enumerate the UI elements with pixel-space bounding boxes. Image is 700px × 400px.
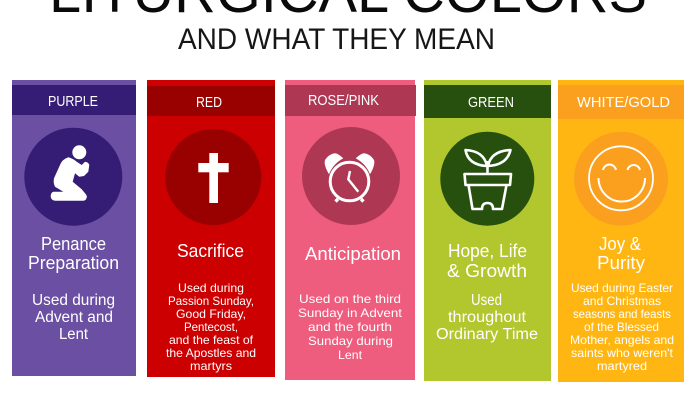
gold usage: and Christmas xyxy=(583,294,661,308)
green meaning xyxy=(447,241,527,281)
green usage: Ordinary Time xyxy=(436,326,538,343)
panel: red xyxy=(147,80,275,377)
icon: potted plant xyxy=(440,132,534,226)
red usage: Pentecost, xyxy=(184,320,238,334)
gold usage: martyred xyxy=(597,359,647,373)
green header: GREEN xyxy=(468,94,514,111)
pink meaning: Anticipation xyxy=(305,244,401,264)
pink usage: Used on the third xyxy=(299,292,401,306)
pink header: ROSE/PINK xyxy=(308,92,379,109)
panel: rose/pink xyxy=(285,80,416,380)
red usage: the Apostles and xyxy=(166,346,256,360)
gold meaning: Joy & xyxy=(599,234,641,254)
gold usage xyxy=(570,281,674,373)
gold header xyxy=(558,85,684,119)
purple meaning: Penance xyxy=(41,234,106,254)
gold usage: saints who weren't xyxy=(571,346,674,360)
red header xyxy=(147,86,275,116)
purple meaning xyxy=(28,234,119,273)
green usage xyxy=(436,292,538,343)
pink usage: and the fourth xyxy=(308,320,392,334)
green usage: throughout xyxy=(448,309,527,326)
purple header: PURPLE xyxy=(48,93,98,110)
red usage: Used during xyxy=(178,281,244,295)
purple usage: Used during xyxy=(32,292,115,309)
panel: white/gold xyxy=(558,80,684,382)
purple usage: Advent and xyxy=(35,309,113,326)
gold meaning xyxy=(597,234,645,273)
green header xyxy=(424,85,551,118)
icon: cross xyxy=(165,129,261,225)
panel: purple xyxy=(12,80,136,376)
icon: smiley xyxy=(574,132,668,226)
gold header: WHITE/GOLD xyxy=(577,94,670,111)
purple header xyxy=(12,85,136,115)
purple usage: Lent xyxy=(59,326,89,343)
red usage: martyrs xyxy=(190,359,232,373)
pink usage xyxy=(298,292,403,362)
red usage: Good Friday, xyxy=(176,307,246,321)
subtitle: AND WHAT THEY MEAN xyxy=(178,23,495,56)
pink header xyxy=(285,85,416,116)
red usage: and the feast of xyxy=(169,333,254,347)
gold meaning: Purity xyxy=(597,253,645,273)
icon: alarm clock xyxy=(302,127,400,225)
pink usage: Sunday during xyxy=(308,334,393,348)
green meaning: Hope, Life xyxy=(448,241,527,261)
purple usage xyxy=(32,292,115,343)
gold usage: of the Blessed xyxy=(584,320,659,334)
red header: RED xyxy=(196,94,222,111)
icon: praying figure xyxy=(24,128,122,226)
green meaning: & Growth xyxy=(447,261,527,281)
red meaning: Sacrifice xyxy=(177,241,244,261)
green usage: Used xyxy=(471,292,502,309)
red usage xyxy=(166,281,256,373)
purple meaning: Preparation xyxy=(28,253,119,273)
red usage: Passion Sunday, xyxy=(168,294,254,308)
gold usage: Used during Easter xyxy=(571,281,673,295)
pink usage: Lent xyxy=(338,348,363,362)
gold usage: Mother, angels and xyxy=(570,333,674,347)
gold usage: seasons and feasts xyxy=(573,307,671,321)
pink usage: Sunday in Advent xyxy=(298,306,403,320)
panel: green xyxy=(424,80,551,381)
